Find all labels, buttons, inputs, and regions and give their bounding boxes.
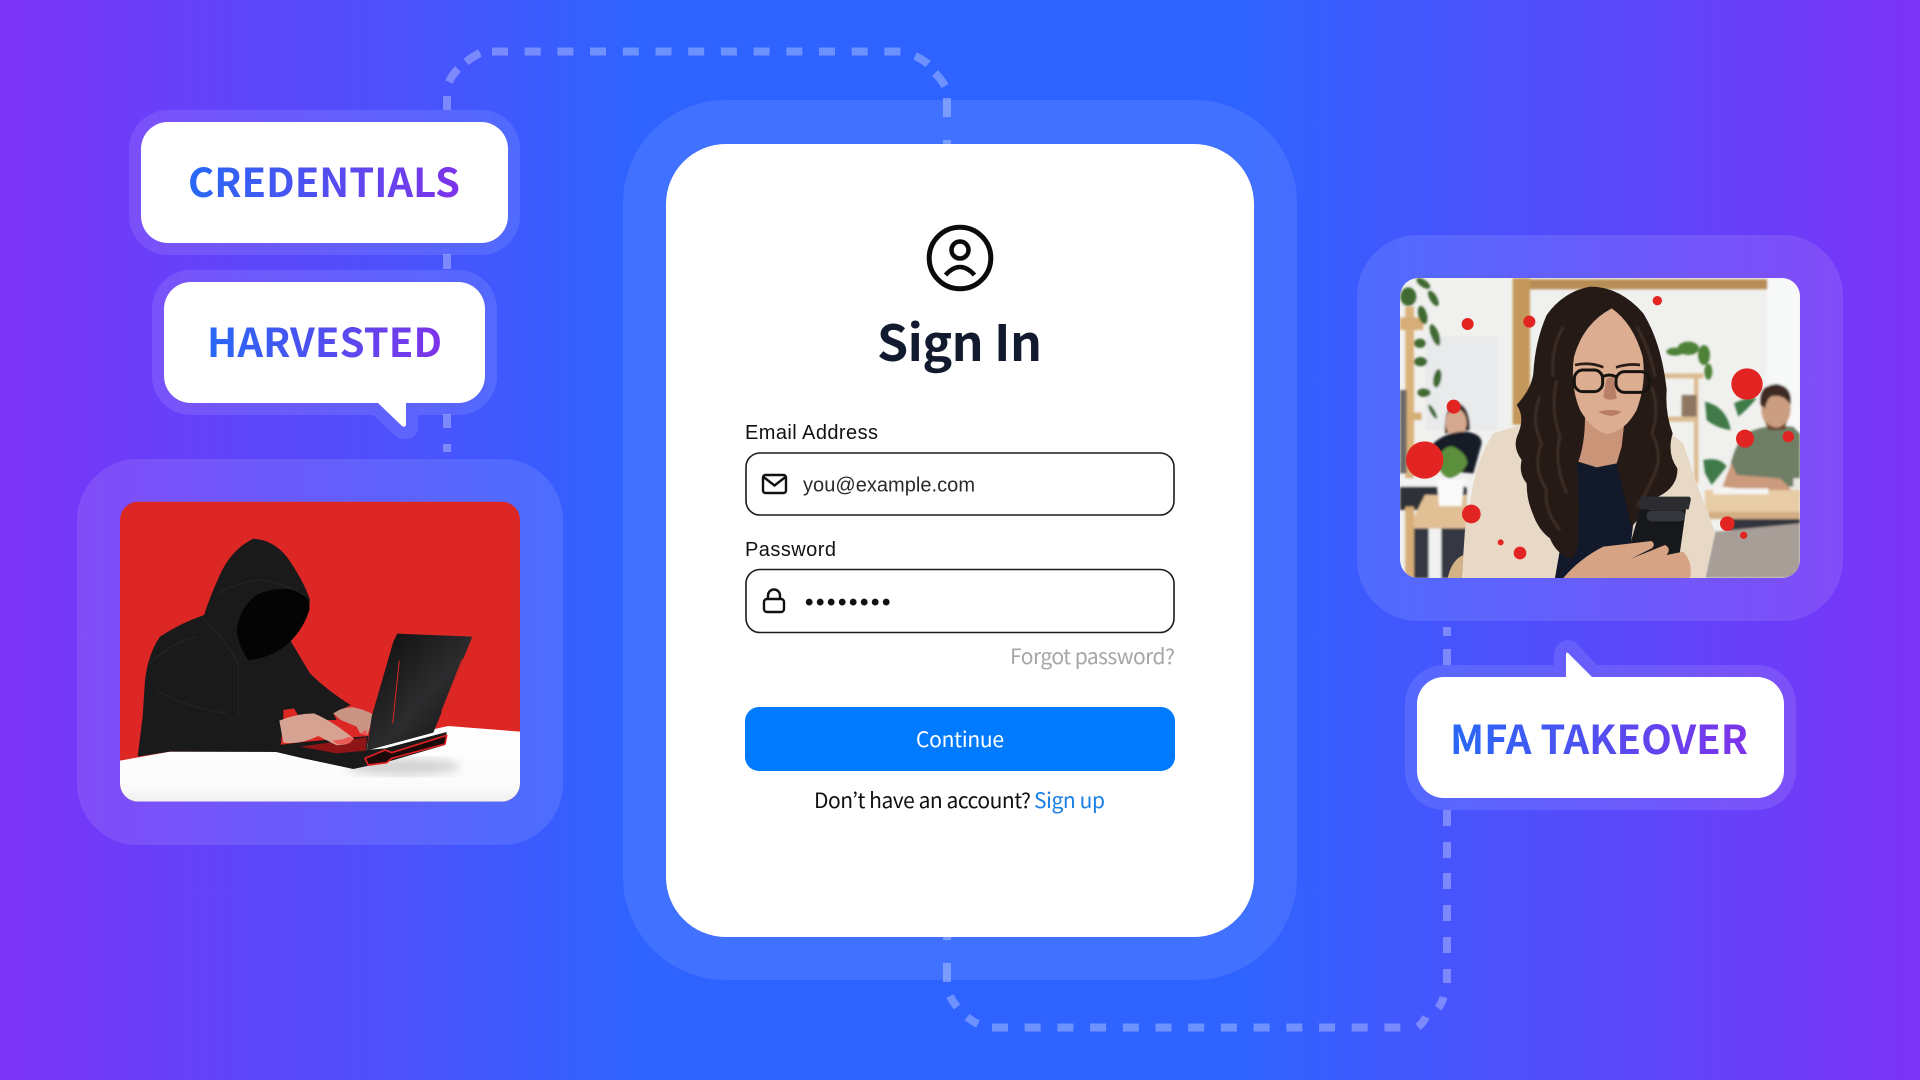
colleague left bbox=[1445, 403, 1470, 433]
icon: user profile bbox=[929, 227, 991, 289]
bubble: MFA TAKEOVER bbox=[1417, 652, 1784, 798]
woman: glasses bbox=[1574, 370, 1649, 392]
woman: phone bbox=[1639, 497, 1691, 509]
woman: hands bbox=[1563, 541, 1691, 578]
left vine bbox=[1400, 276, 1443, 420]
placeholder: you@example.com: you@example.com bbox=[803, 474, 975, 496]
laptop base bbox=[257, 732, 447, 769]
input: password bbox=[746, 570, 1174, 632]
colleague right bbox=[1729, 426, 1800, 487]
link: forgot password: Forgot password? bbox=[1010, 641, 1175, 671]
bubble: CREDENTIALS: CREDENTIALS bbox=[188, 151, 460, 209]
bubble: MFA TAKEOVER: MFA TAKEOVER bbox=[1450, 708, 1748, 766]
panel: sign-in card bbox=[666, 144, 1254, 937]
table bbox=[120, 726, 520, 802]
bubble: CREDENTIALS bbox=[129, 110, 520, 255]
laptop lid bbox=[367, 634, 472, 751]
hands bbox=[333, 707, 374, 735]
heading: Sign In: Sign In bbox=[877, 304, 1042, 376]
woman: neck and face bbox=[1578, 417, 1625, 467]
input: email bbox=[746, 453, 1174, 515]
panel halo: sign-in card bbox=[623, 100, 1297, 980]
button: continue: Continue bbox=[916, 724, 1004, 754]
button: continue bbox=[745, 707, 1175, 771]
masked password dots: •••••••• bbox=[805, 589, 893, 616]
attack indicator dots bbox=[1406, 296, 1794, 559]
shelf and plant right bbox=[1666, 342, 1712, 380]
icon: envelope bbox=[763, 475, 786, 493]
office background bbox=[1764, 278, 1800, 434]
panel halo: hacker photo bbox=[77, 459, 563, 845]
label: Password: Password bbox=[745, 539, 836, 561]
table right bbox=[1705, 490, 1800, 512]
photo: worried woman checking phone in office bbox=[1400, 276, 1800, 578]
hooded figure bbox=[138, 539, 351, 757]
sign-up prompt: Sign up bbox=[1034, 785, 1105, 815]
woman: jacket bbox=[1462, 423, 1715, 578]
photo: hooded hacker at laptop bbox=[120, 502, 520, 802]
label: Email Address: Email Address bbox=[745, 422, 878, 444]
table left bbox=[1400, 478, 1470, 487]
bubble: HARVESTED bbox=[164, 282, 485, 427]
panel halo: worried employee photo bbox=[1357, 235, 1843, 621]
icon: padlock bbox=[764, 590, 784, 612]
woman: top bbox=[1555, 460, 1633, 578]
woman: hair bbox=[1516, 287, 1677, 558]
sign-up prompt: Don’t have an account? bbox=[814, 785, 1031, 815]
bubble: HARVESTED: HARVESTED bbox=[207, 311, 442, 369]
dashed connector: top, credentials to sign-in card bbox=[447, 52, 947, 452]
dashed connector: bottom, sign-in card to MFA takeover bbox=[947, 627, 1447, 1028]
